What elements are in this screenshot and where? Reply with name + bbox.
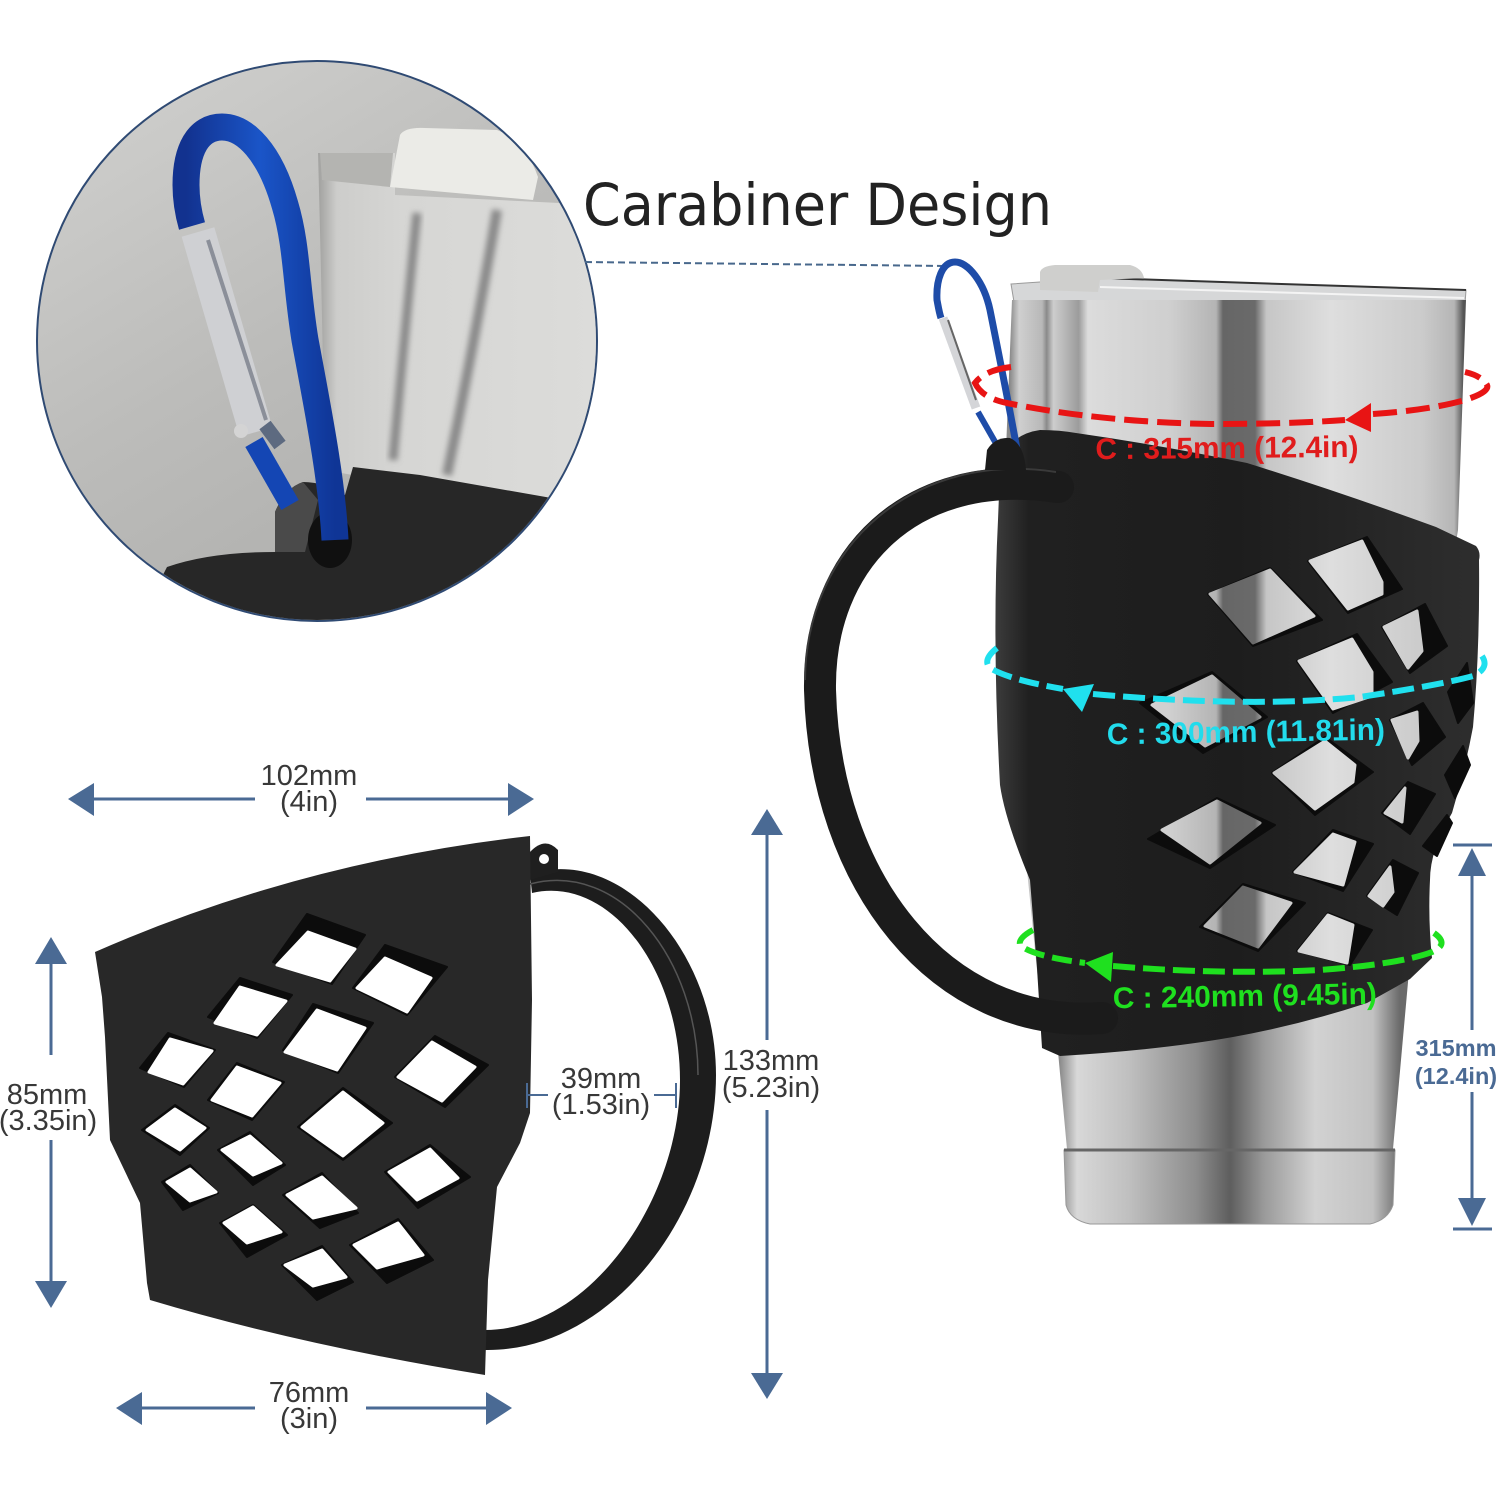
dimension: 39mm handle gap [527,1063,676,1121]
tumbler lower body [1056,960,1410,1160]
dimension: tumbler lower height 315mm [1410,845,1497,1229]
dimension: 133mm total height [722,809,820,1399]
measurement: top circumference: C : 315mm (12.4in) [1095,431,1359,466]
carabiner [937,262,1018,455]
sleeve openings [1140,537,1473,965]
carabiner close-up [186,127,335,540]
measurement: top circumference [975,367,1487,466]
flat sleeve handle [485,869,716,1350]
dimension: tumbler lower height 315mm: (12.4in) [1415,1063,1497,1089]
strap loop [985,438,1026,470]
sleeve on tumbler [995,430,1480,1056]
dimension: 39mm handle gap: 39mm [561,1063,641,1095]
flat sleeve carabiner tab [530,843,558,880]
dimension: 76mm bottom width: 76mm [269,1377,349,1409]
tumbler photo [805,262,1480,1224]
tumbler close-up [318,128,600,520]
panel: carabiner detail circle [37,61,620,640]
dimension: 39mm handle gap: (1.53in) [552,1089,650,1121]
dimension: 85mm height [0,937,97,1308]
flat sleeve diamond openings [140,914,488,1300]
dimension: 133mm total height: (5.23in) [722,1072,820,1104]
dimension: tumbler lower height 315mm: 315mm [1416,1035,1496,1061]
title: Carabiner Design: Carabiner Design [583,171,1052,239]
dimension: 133mm total height: 133mm [723,1045,819,1077]
flat sleeve body [95,836,532,1375]
dimension: 102mm top width [68,760,534,818]
dimension: 76mm bottom width: (3in) [280,1403,338,1435]
tumbler body [1000,300,1466,1000]
tumbler lid [1011,265,1466,304]
dimension: 85mm height: (3.35in) [0,1105,97,1137]
dimension: 76mm bottom width [116,1377,512,1435]
measurement: bottom circumference: C : 240mm (9.45in) [1113,978,1377,1015]
dimension: 102mm top width: (4in) [280,786,338,818]
dimension: 85mm height: 85mm [7,1079,87,1111]
tumbler base [1064,1150,1395,1224]
measurement: bottom circumference [1020,930,1442,1015]
callout leader line [585,262,945,266]
dimension: 102mm top width: 102mm [261,760,357,792]
handle [820,484,1102,1019]
flat sleeve product [95,836,716,1375]
measurement: middle circumference: C : 300mm (11.81in) [1107,714,1385,751]
measurement: middle circumference [987,648,1485,751]
sleeve close-up [164,467,548,620]
